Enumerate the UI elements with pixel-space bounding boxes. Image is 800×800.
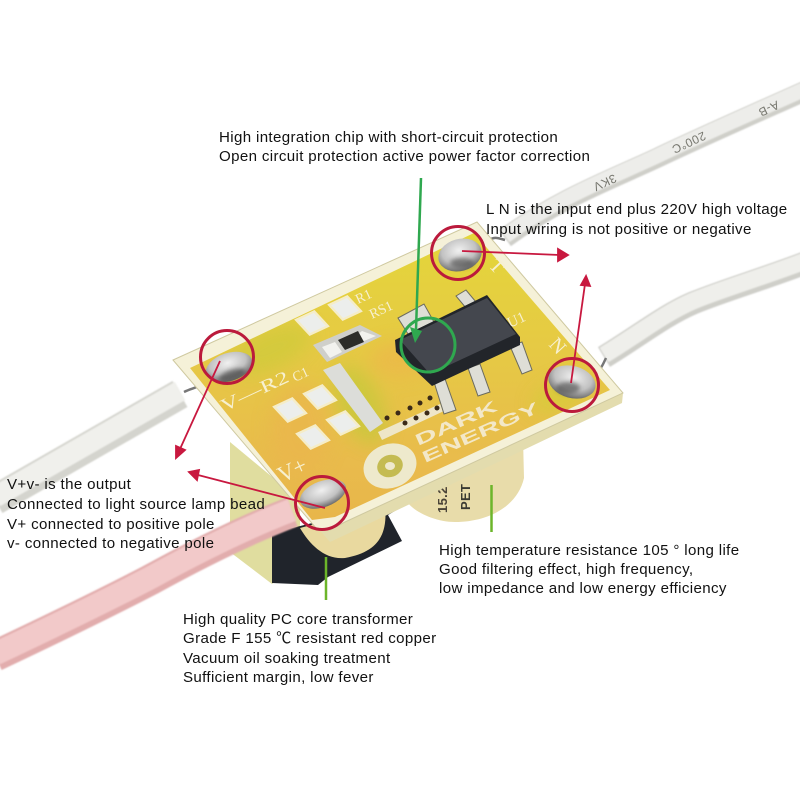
PCB board: C1 (290, 365, 312, 386)
text: output: v- connected to negative pole (7, 535, 214, 552)
text: output: V+v- is the output (7, 476, 132, 493)
mounting ring (357, 436, 423, 496)
text: output: V+ connected to positive pole (7, 516, 215, 533)
top input wire: 3KV (591, 171, 619, 194)
PCB board: ENERGY (420, 400, 542, 467)
colour patches (232, 319, 584, 447)
solder pads (202, 234, 599, 514)
text: chip (219, 129, 590, 165)
grey bar (323, 363, 383, 432)
PCB board (173, 222, 623, 542)
top input wire (488, 89, 800, 241)
text: chip: Open circuit protection active power factor correction (219, 148, 590, 165)
text: transformer: Grade F 155 ℃ resistant red copper (183, 630, 437, 647)
PCB board: V+ (274, 452, 311, 488)
PCB board: RS1 (367, 299, 396, 323)
silk labels: V—R2 (217, 367, 292, 416)
right input wire (597, 261, 800, 371)
PCB board: R1 (353, 287, 375, 308)
capacitor right: 15.2 (435, 486, 450, 513)
PCB board: DARK (413, 398, 501, 450)
header holes (378, 404, 444, 440)
PCB board: U1 (505, 309, 528, 332)
text: chip: High integration chip with short-circuit protection (219, 129, 558, 146)
text: capacitor: High temperature resistance 105 ° long life (439, 542, 739, 559)
chip U1 (395, 295, 520, 386)
capacitor right: PET (458, 484, 473, 510)
text: capacitor (439, 542, 739, 597)
text: output (7, 476, 265, 552)
text: capacitor: low impedance and low energy efficiency (439, 580, 727, 597)
PCB board: N (544, 333, 570, 359)
text: input (486, 201, 787, 238)
red arrows (176, 249, 590, 508)
component pads (274, 296, 361, 449)
text: transformer: Vacuum oil soaking treatment (183, 650, 391, 667)
transformer black core (272, 505, 405, 585)
small capacitor body (300, 505, 386, 558)
text: capacitor: Good filtering effect, high frequency, (439, 561, 693, 578)
red circles (200, 226, 598, 530)
board edge (316, 393, 623, 542)
left output wire (0, 382, 206, 500)
transformer yellow body (230, 442, 300, 584)
green arrow to chip (410, 178, 422, 343)
text: transformer: High quality PC core transformer (183, 611, 413, 628)
text: output: Connected to light source lamp bead (7, 496, 265, 513)
capacitor right (408, 438, 524, 522)
green circle on chip (401, 318, 455, 372)
chip leads (398, 290, 532, 414)
resistor (313, 325, 382, 362)
top input wire: 200°C (669, 129, 708, 157)
text: input: L N is the input end plus 220V high voltage (486, 201, 787, 218)
text: transformer (183, 611, 437, 686)
text: input: Input wiring is not positive or negative (486, 221, 752, 238)
top input wire: A-B (756, 98, 781, 120)
green leader lines (326, 485, 492, 600)
PCB board: T (484, 254, 509, 278)
pink wire (0, 510, 292, 656)
text: transformer: Sufficient margin, low fever (183, 669, 374, 686)
